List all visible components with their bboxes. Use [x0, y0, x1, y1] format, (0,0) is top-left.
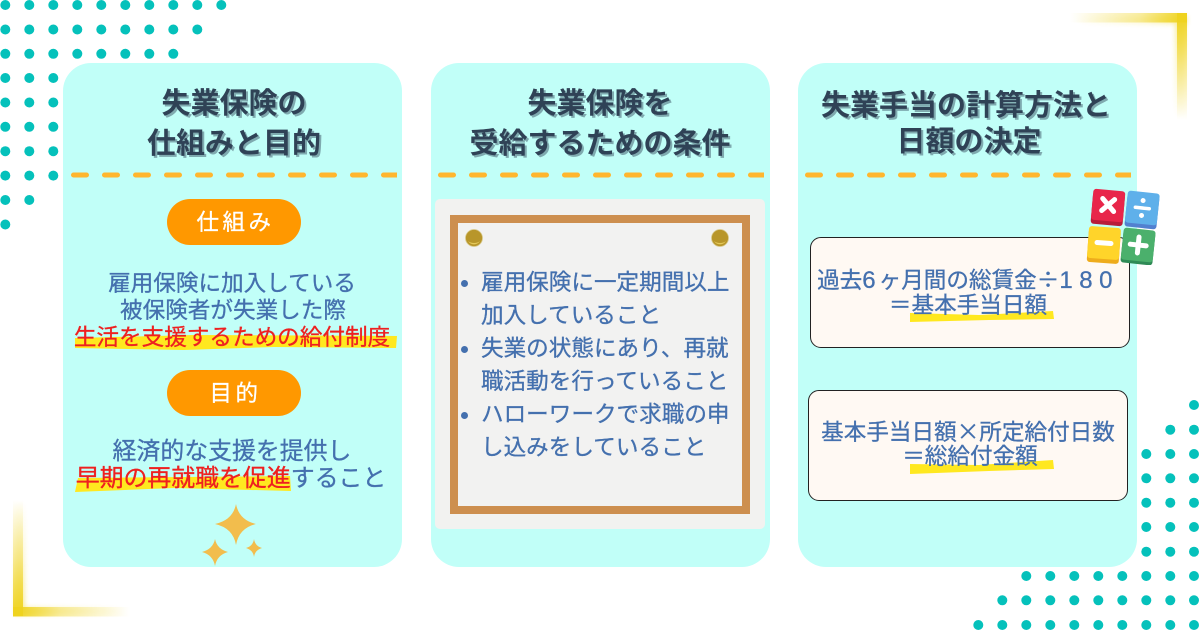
section: mechanism: [74, 199, 397, 350]
corner accent: top right: [1076, 12, 1190, 116]
badge: purpose: 目的: [209, 381, 262, 406]
bullet list: eligibility conditions: し込みをしていること: [481, 435, 706, 460]
badge: mechanism: [167, 199, 301, 245]
heading: benefit calculation: 日額の決定: [896, 126, 1042, 158]
text block: mechanism description: 生活を支援するための給付制度: [74, 325, 390, 350]
tile: divide: [1124, 190, 1160, 230]
corner accent: bottom left: [12, 503, 124, 618]
panel: mechanism and purpose: [63, 63, 402, 567]
bullet list: eligibility conditions: 加入していること: [481, 303, 661, 328]
tile: plus: [1120, 227, 1156, 266]
bullet list: eligibility conditions: 雇用保険に一定期間以上: [481, 270, 730, 295]
bullet: condition 1: [461, 280, 468, 286]
text block: mechanism description: [74, 271, 397, 350]
card: total benefit formula: ＝総給付金額: [902, 444, 1038, 469]
card: daily allowance formula: 過去6ヶ月間の総賃金÷180: [817, 262, 1119, 295]
heading: mechanism and purpose: 失業保険の: [161, 88, 307, 120]
dot pattern: top left: [0, 0, 226, 230]
section: purpose: [75, 370, 386, 492]
panel: eligibility conditions: [431, 63, 770, 567]
wooden frame: [450, 215, 750, 514]
badge: purpose: [167, 370, 301, 416]
heading: eligibility conditions: [469, 88, 732, 160]
heading: mechanism and purpose: 仕組みと目的: [147, 128, 321, 160]
heading: benefit calculation: 失業手当の計算方法と: [821, 90, 1111, 122]
badge: mechanism: 仕組み: [196, 210, 274, 235]
bullet list: eligibility conditions: 失業の状態にあり、再就: [481, 336, 729, 361]
text block: purpose description: 経済的な支援を提供し: [113, 438, 351, 465]
icon: pin left: [465, 229, 483, 247]
bullet list: eligibility conditions: ハローワークで求職の申: [481, 402, 730, 427]
heading: eligibility conditions: 受給するための条件: [469, 128, 731, 160]
bullet: condition 2: [461, 346, 468, 352]
text block: purpose description: 早期の再就職を促進すること: [76, 465, 386, 492]
text block: purpose description: [75, 438, 386, 492]
card: daily allowance formula: [810, 237, 1130, 348]
highlight: yellow brush: [75, 335, 397, 350]
text block: mechanism description: 被保険者が失業した際: [120, 298, 346, 323]
bullet list: eligibility conditions: 職活動を行っていること: [481, 369, 728, 394]
highlight: yellow brush: [75, 476, 291, 492]
heading: mechanism and purpose: [147, 88, 322, 160]
tile: multiply: [1090, 189, 1125, 226]
highlight: yellow brush: [910, 311, 1054, 322]
icon: sparkles: [202, 504, 262, 566]
card: daily allowance formula: ＝基本手当日額: [889, 293, 1047, 318]
highlight: yellow brush: [910, 460, 1054, 474]
icon: arithmetic tiles: [1086, 188, 1160, 265]
notice board: [435, 199, 765, 529]
card: total benefit formula: 基本手当日額×所定給付日数: [821, 414, 1115, 447]
card: total benefit formula: [808, 390, 1128, 501]
tile: minus: [1087, 226, 1121, 264]
icon: pin right: [711, 229, 729, 247]
text block: mechanism description: 雇用保険に加入している: [108, 271, 356, 296]
panel: benefit calculation: [798, 63, 1137, 567]
heading: eligibility conditions: 失業保険を: [527, 88, 673, 120]
dot pattern: bottom right: [973, 400, 1199, 630]
bullet: condition 3: [461, 412, 468, 418]
bullet list: eligibility conditions: [461, 270, 730, 460]
heading: benefit calculation: [821, 90, 1111, 158]
